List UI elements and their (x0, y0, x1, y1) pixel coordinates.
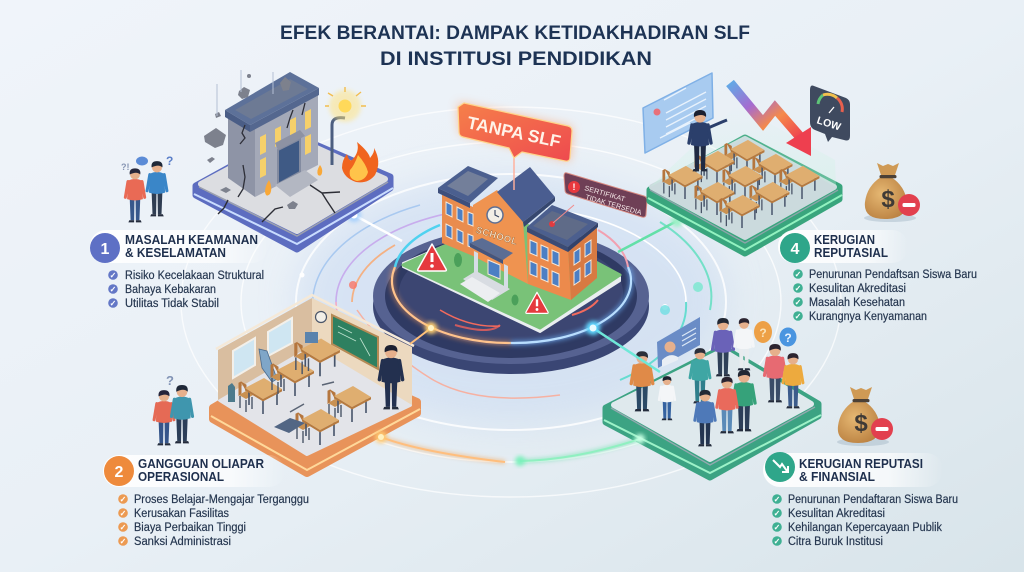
panel 2 header (103, 455, 285, 487)
fire (342, 142, 378, 182)
connector: panel 1 (347, 208, 402, 241)
declining arrow (730, 83, 811, 156)
desks (239, 378, 282, 414)
callout: sertifikat tidak tersedia: TIDAK TERSEDIA (584, 194, 642, 217)
panel 1 header (90, 230, 268, 263)
icon: money bag 2 (837, 387, 893, 446)
sign: tanpa slf (458, 103, 572, 190)
panel 4 list: Masalah Kesehatan (809, 297, 905, 309)
connector: panel 5 to hub (515, 321, 660, 466)
panel 4 header: 4 (791, 241, 800, 258)
panel 4 list: ✓ (795, 298, 801, 307)
panel 2 list: Kerusakan Fasilitas (134, 508, 229, 520)
school building (438, 166, 598, 306)
confusion marks: ? (166, 373, 174, 388)
panel 2 header: OPERASIONAL (138, 470, 224, 484)
panel 5 list: ✓ (774, 509, 780, 518)
hub halo (296, 175, 726, 425)
panel 4 header: KERUGIAN (814, 233, 875, 247)
panel 2 people (154, 373, 192, 445)
clock (487, 207, 503, 223)
panel 1 header: & KESELAMATAN (125, 246, 226, 260)
icon: money bag 1 (864, 163, 920, 222)
concentric impact rings (181, 107, 841, 497)
connector: panel 4 (618, 215, 683, 252)
panel 1 list: Risiko Kecelakaan Struktural (125, 270, 264, 282)
question bubbles: ? (784, 331, 792, 345)
panel 1 header: MASALAH KEAMANAN (125, 233, 258, 247)
sign: tanpa slf: TANPA SLF (465, 112, 563, 152)
base (650, 138, 839, 253)
disc (373, 225, 649, 374)
panel 2 list: Proses Belajar-Mengajar Terganggu (134, 494, 309, 506)
panel 4 list: Kesulitan Akreditasi (809, 283, 906, 295)
panel 1 illustration: cracked building (194, 70, 393, 249)
panel 4 list: ✓ (795, 312, 801, 321)
ground cracks (218, 185, 340, 222)
panel 1 list: ✓ (110, 285, 116, 294)
panel 4 list: ✓ (795, 270, 801, 279)
panel 1 list: Bahaya Kebakaran (125, 284, 216, 296)
school name: SCHOOL (474, 225, 519, 248)
panel 4 header (778, 230, 908, 263)
id card (657, 317, 700, 368)
panel 5 list: Kehilangan Kepercayaan Publik (788, 522, 942, 534)
panel 4 list (793, 269, 977, 323)
icon: falling trend (765, 452, 795, 482)
panel 5 illustration: people (604, 317, 821, 477)
panel 2 header: 2 (115, 464, 124, 481)
central hub (373, 103, 649, 374)
panel 4 list: Kurangnya Kenyamanan (809, 311, 927, 323)
panel 4 header: REPUTASIAL (814, 246, 888, 260)
panel 2 list: Sanksi Administrasi (134, 536, 231, 548)
panel 1 list: Utilitas Tidak Stabil (125, 298, 219, 310)
walls (218, 298, 312, 400)
title (280, 23, 750, 70)
panel 5 list: ✓ (774, 523, 780, 532)
panel 5 list: ✓ (774, 495, 780, 504)
panel 2 header: GANGGUAN OLIAPAR (138, 457, 264, 471)
warning triangle left (418, 244, 446, 271)
panel 5 list (772, 494, 958, 548)
panel 1 list: ✓ (110, 299, 116, 308)
callout: sertifikat tidak tersedia: SERTIFIKAT (583, 185, 626, 204)
title: DI INSTITUSI PENDIDIKAN (380, 49, 652, 70)
panel 5 header: & FINANSIAL (799, 470, 875, 484)
base (196, 134, 390, 249)
speech bubble icons: ?! (121, 162, 130, 172)
base (213, 353, 417, 473)
teacher (689, 110, 711, 171)
question bubbles (754, 321, 796, 346)
panel 2 list: ✓ (120, 523, 126, 532)
windows (233, 318, 292, 378)
debris (204, 74, 298, 209)
callout: sertifikat tidak tersedia (553, 173, 647, 223)
panel 2 list: Biaya Perbaikan Tinggi (134, 522, 246, 534)
speech bubble icons (121, 154, 173, 172)
panel 5 list: Penurunan Pendaftaran Siswa Baru (788, 494, 958, 506)
panel 5 list: Citra Buruk Institusi (788, 536, 883, 548)
low gauge: LOW (815, 114, 842, 133)
chalkboard (332, 315, 378, 369)
panel 4 list: Penurunan Pendaftsan Siswa Baru (809, 269, 977, 281)
panel 5 header (763, 452, 943, 487)
panel 5 list: ✓ (774, 537, 780, 546)
panel 1 people (121, 154, 173, 222)
panel 2 illustration: damaged classroom (211, 295, 420, 473)
panel 4 list: ✓ (795, 284, 801, 293)
connector: panel 2 to hub (375, 322, 505, 462)
question bubbles: ? (759, 326, 767, 340)
warning triangle right (526, 292, 548, 313)
panel 1 list (108, 270, 264, 310)
debris (274, 418, 305, 433)
grass platform (403, 216, 620, 332)
teacher (379, 345, 403, 409)
building (225, 72, 319, 197)
hologram volume (650, 105, 836, 187)
windows (446, 202, 591, 287)
street lamp (325, 87, 366, 165)
panel 5 header: KERUGIAN REPUTASI (799, 457, 923, 471)
projection screen (643, 73, 713, 153)
panel 4 illustration: empty classroom (643, 73, 850, 253)
panel 2 list: ✓ (120, 509, 126, 518)
desks (725, 140, 764, 173)
clock (316, 312, 326, 322)
panel 1 header: 1 (101, 241, 110, 258)
title: EFEK BERANTAI: DAMPAK KETIDAKHADIRAN SLF (280, 23, 750, 44)
portico (460, 238, 513, 302)
panel 2 list: ✓ (120, 537, 126, 546)
fallen panel (259, 349, 277, 382)
panel 5 list: Kesulitan Akreditasi (788, 508, 885, 520)
panel 2 list: ✓ (120, 495, 126, 504)
base (606, 348, 818, 477)
panel 1 list: ✓ (110, 271, 116, 280)
low gauge (810, 86, 850, 142)
callout: sertifikat tidak tersedia: ! (572, 182, 576, 192)
speech bubble icons: ? (166, 154, 173, 168)
people (713, 318, 733, 376)
panel 2 list (118, 494, 309, 548)
